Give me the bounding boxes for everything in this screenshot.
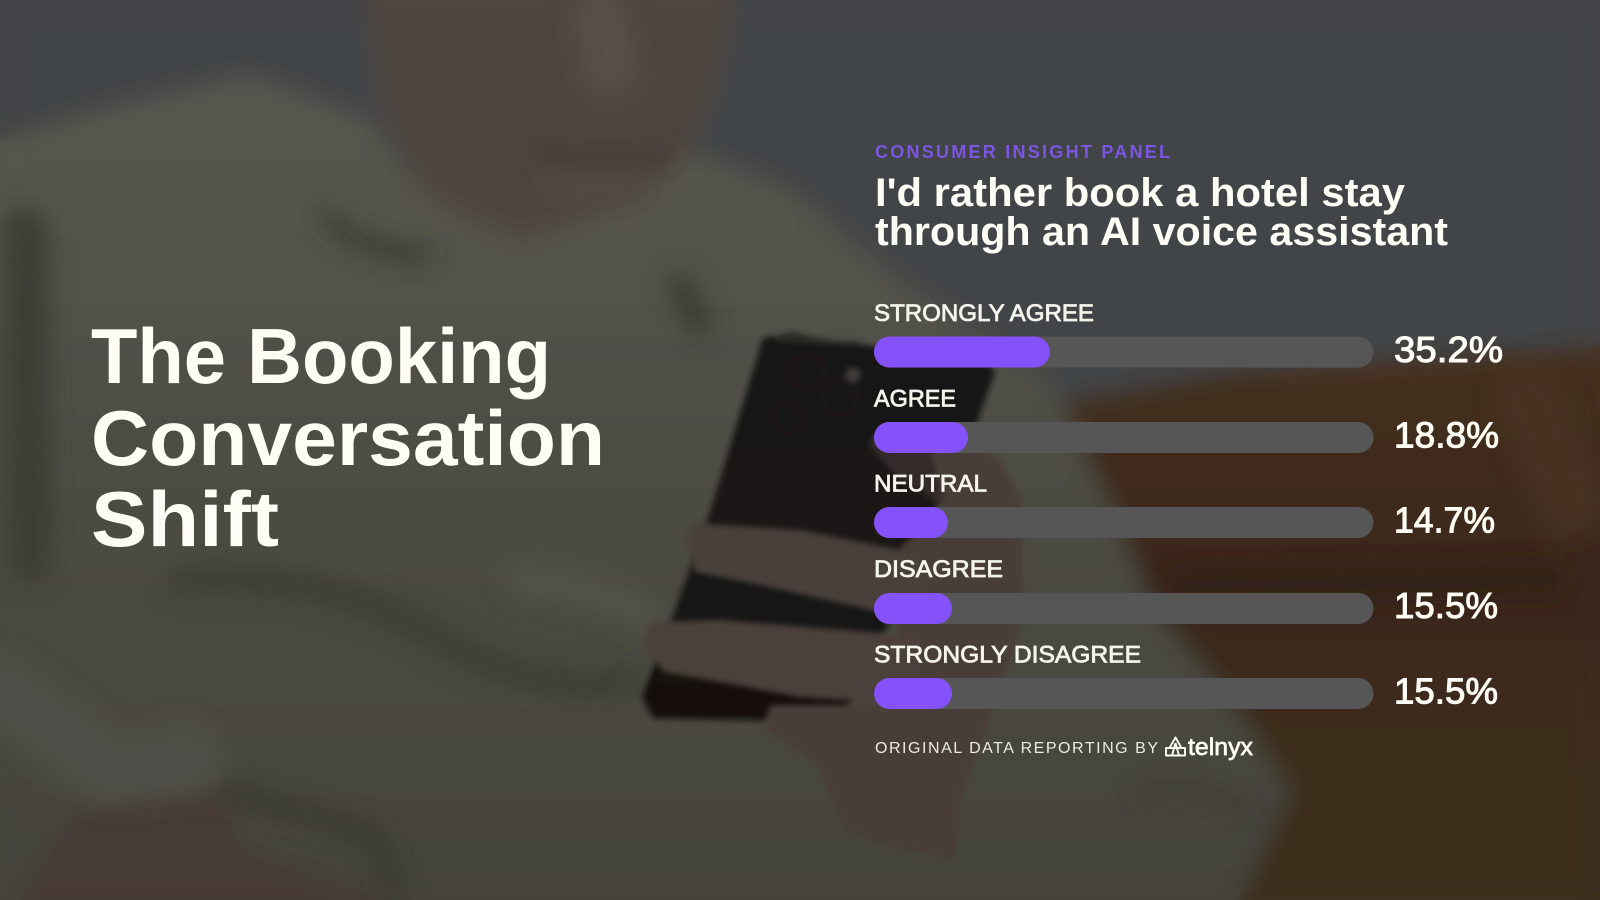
row: neutral 14.7%: 14.7% [1394, 500, 1495, 540]
row: strongly agree 35.2%: STRONGLY AGREE [874, 300, 1094, 327]
row: disagree 15.5%: DISAGREE [874, 556, 1003, 583]
footer: data attribution [875, 734, 1253, 761]
title [91, 312, 605, 563]
title: The Booking [91, 312, 551, 400]
row: agree 18.8%: AGREE [874, 386, 956, 412]
row: agree 18.8% [874, 386, 1499, 456]
survey statement heading: I'd rather book a hotel stay [875, 171, 1406, 215]
row: disagree 15.5% [874, 556, 1498, 626]
row: neutral 14.7% [874, 470, 1495, 540]
survey statement heading: through an AI voice assistant [875, 210, 1448, 254]
row: strongly disagree 15.5%: STRONGLY DISAGREE [874, 642, 1141, 668]
row: neutral 14.7%: NEUTRAL [874, 470, 987, 498]
logo wordmark: telnyx: telnyx [1188, 734, 1253, 761]
footer: data attribution: ORIGINAL DATA REPORTING BY [875, 740, 1158, 757]
row: agree 18.8%: 18.8% [1394, 414, 1499, 456]
row: strongly agree 35.2% [874, 300, 1503, 370]
title: Conversation [91, 394, 605, 482]
icon: telnyx logo mark [1166, 738, 1185, 756]
row: disagree 15.5%: 15.5% [1394, 585, 1498, 626]
hand holding the phone [645, 425, 1022, 860]
row: strongly agree 35.2%: 35.2% [1394, 329, 1503, 370]
bar chart: survey responses [874, 300, 1503, 712]
phone [642, 333, 995, 722]
eyebrow: consumer insight panel: CONSUMER INSIGHT PANEL [875, 142, 1170, 162]
row: strongly disagree 15.5% [874, 642, 1498, 712]
title: Shift [91, 475, 279, 563]
row: strongly disagree 15.5%: 15.5% [1394, 670, 1498, 712]
survey statement heading [875, 171, 1448, 254]
